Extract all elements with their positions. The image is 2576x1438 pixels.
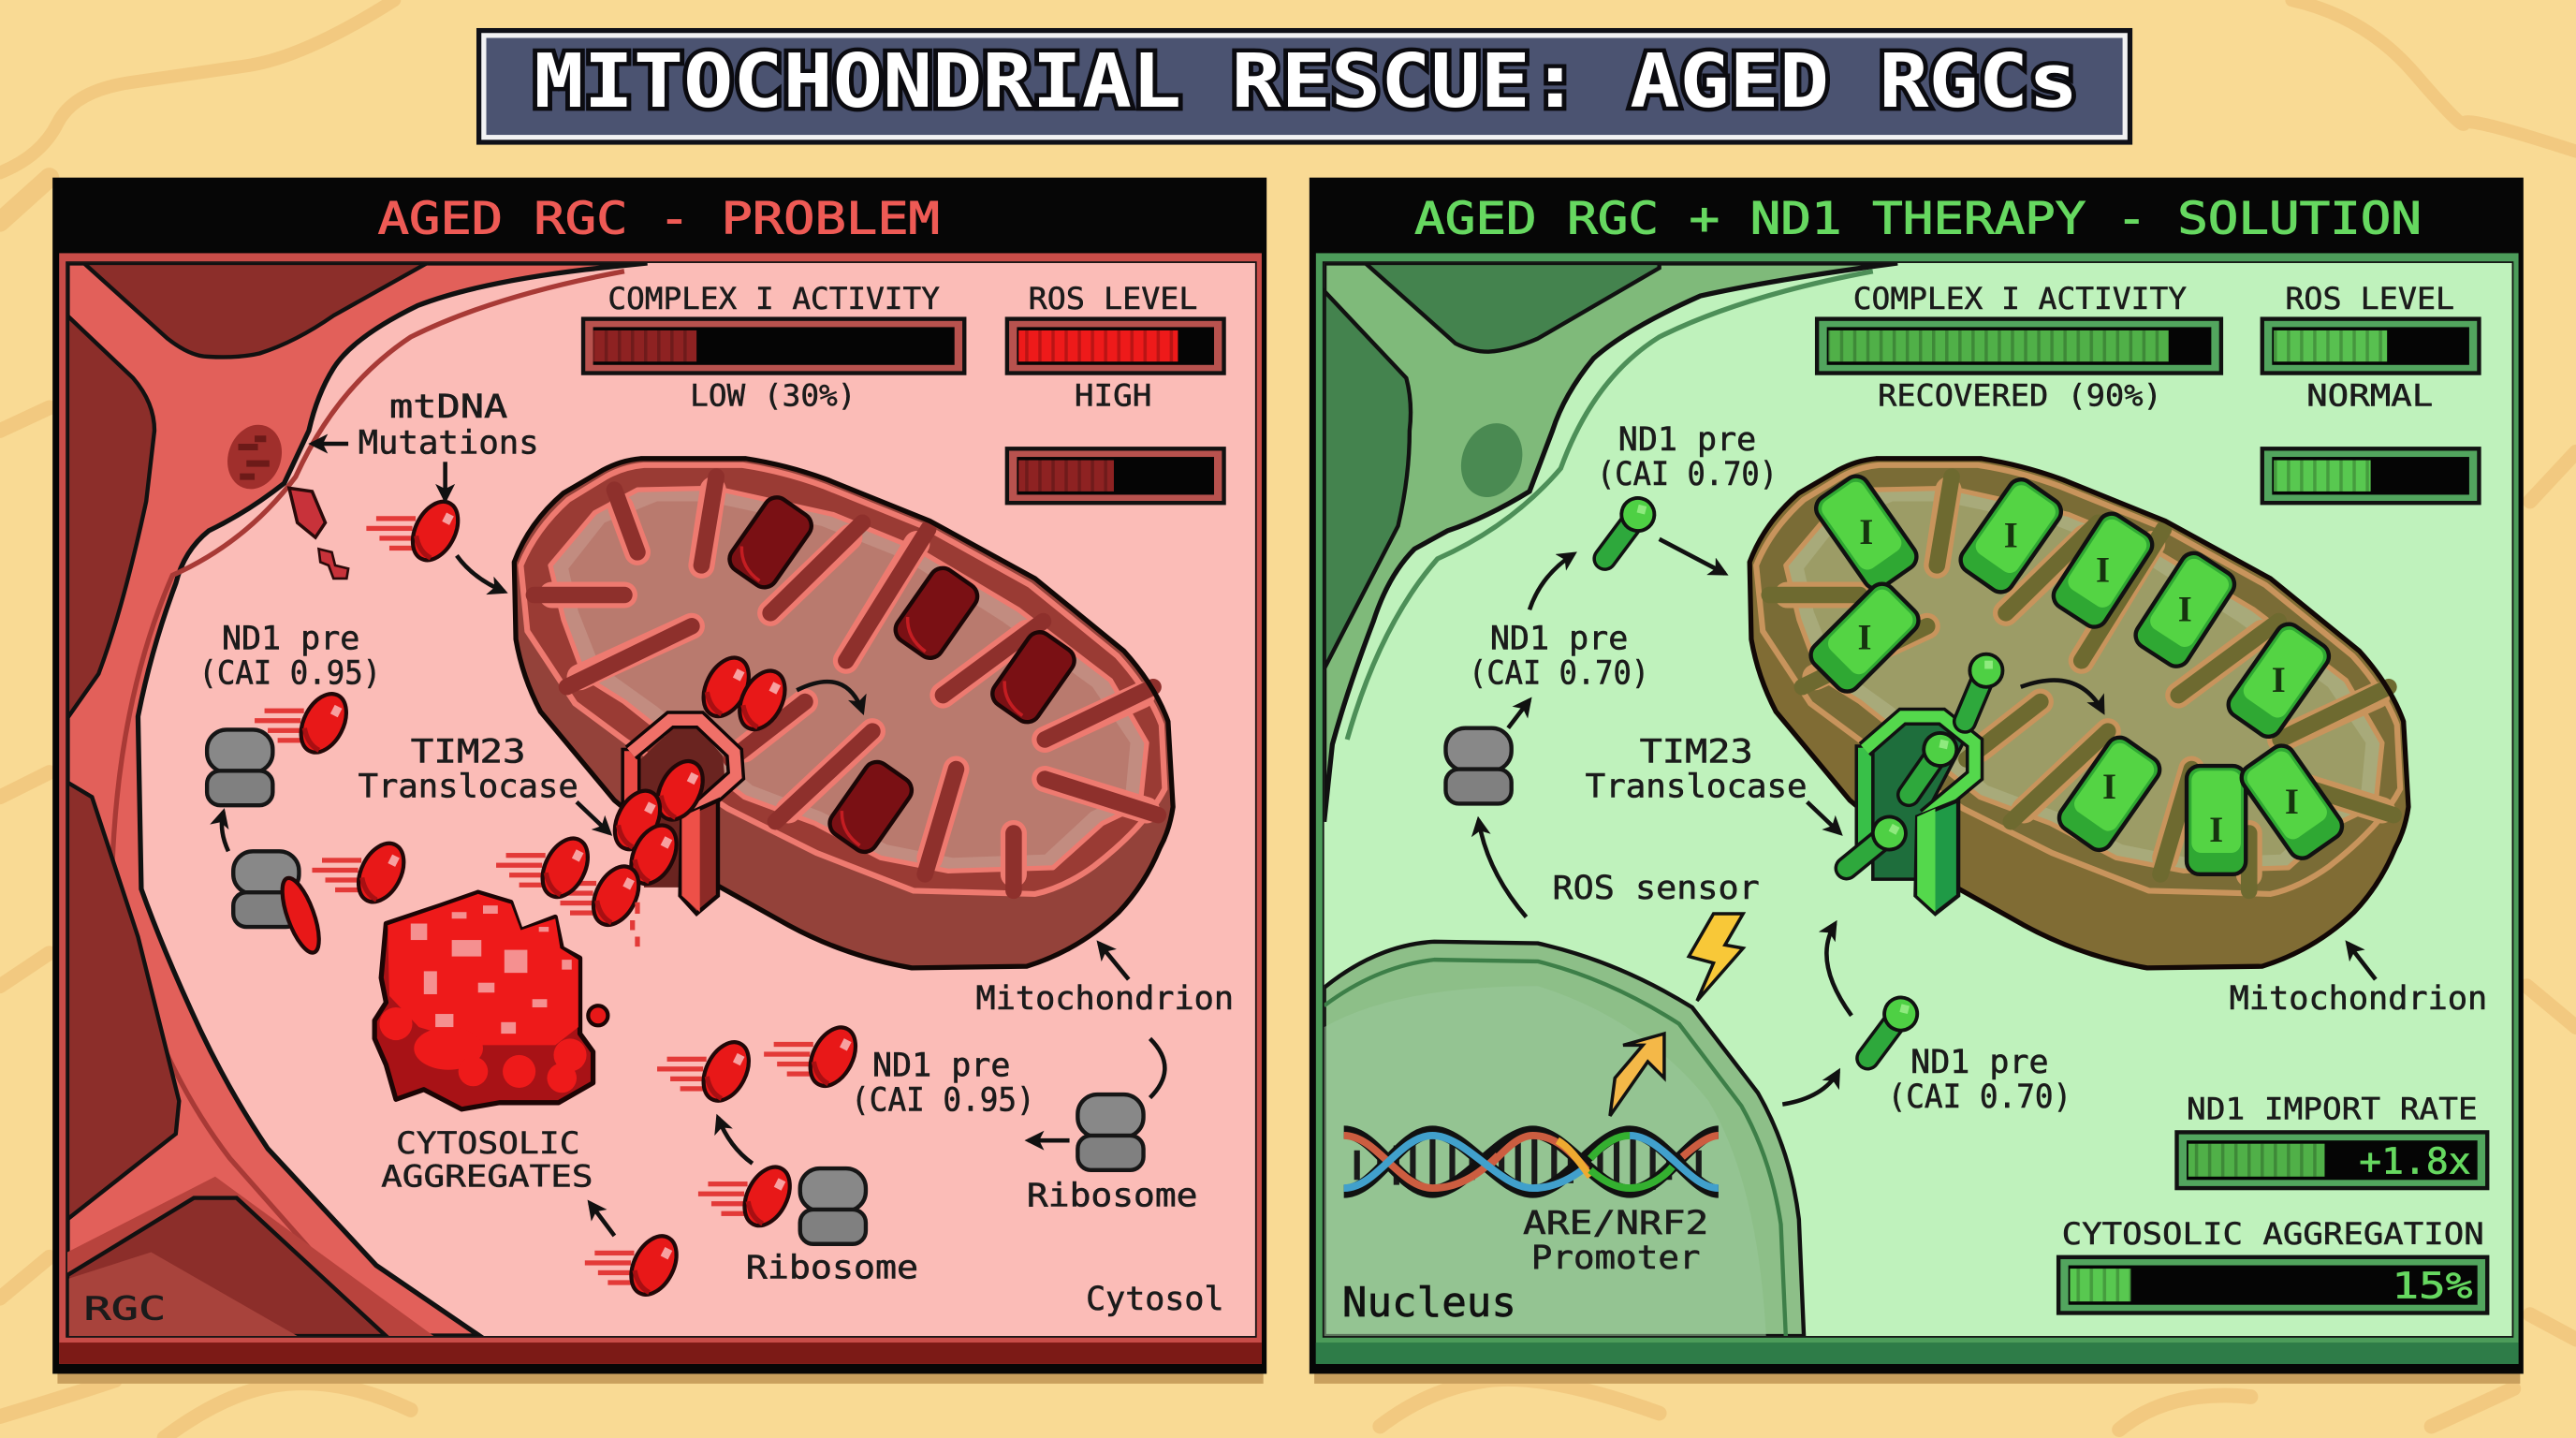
arrows left: [222, 444, 1164, 1236]
complex I blocks restored: I: [2004, 517, 2018, 556]
label: ROS LEVEL: [1029, 283, 1197, 316]
proteins and ribosomes left cytosol: [207, 494, 1144, 1302]
labels left: Ribosome: [1027, 1176, 1197, 1214]
mitochondrion right: [1749, 459, 2408, 968]
labels left: Translocase: [359, 767, 578, 805]
complex I gauge left: [583, 283, 964, 374]
labels left: Mitochondrion: [976, 979, 1234, 1018]
RGC membrane right: [1325, 263, 1897, 822]
labels left: RGC: [84, 1289, 166, 1328]
complex I blocks restored: I: [2209, 811, 2223, 850]
labels left: TIM23: [411, 733, 526, 771]
DNA helix: [1344, 1132, 1719, 1193]
labels right: [1469, 420, 2487, 1116]
labels right: ND1 pre: [1910, 1043, 2049, 1081]
promoter label: [1523, 1204, 1708, 1277]
labels left: CYTOSOLIC: [396, 1127, 580, 1161]
ND1 import rate gauge: [2177, 1093, 2487, 1188]
nucleus label: Nucleus: [1342, 1279, 1516, 1327]
heading: problem: AGED RGC - PROBLEM: [378, 193, 940, 244]
secondary gauge left: [1007, 448, 1224, 503]
labels left: ND1 pre: [872, 1047, 1010, 1085]
ND1 import rate gauge: +1.8x: [2359, 1140, 2471, 1182]
labels right: (CAI 0.70): [1888, 1078, 2071, 1116]
heading: solution: AGED RGC + ND1 THERAPY - SOLUTION: [1414, 193, 2422, 244]
labels right: ND1 pre: [1618, 420, 1756, 459]
labels right: (CAI 0.70): [1597, 455, 1778, 493]
labels right: (CAI 0.70): [1469, 653, 1649, 692]
ROS gauge left: [1007, 283, 1224, 374]
panel: ND1 therapy solution: [1310, 178, 2524, 1384]
complex I blocks restored: I: [2272, 661, 2286, 700]
proteins entering translocase: [496, 651, 794, 946]
labels right: Translocase: [1586, 767, 1808, 805]
nucleus in membrane: [1451, 415, 1532, 506]
recovered value: RECOVERED (90%): [1878, 380, 2162, 414]
labels left: mtDNA: [389, 388, 507, 426]
HIGH value: HIGH: [1075, 380, 1151, 414]
ROS gauge right: [2262, 283, 2479, 374]
icon: lightning: [1689, 914, 1743, 1001]
secondary gauge right: [2262, 448, 2479, 503]
complex I blocks restored: I: [2096, 550, 2110, 590]
icon: up arrow yellow: [1610, 1034, 1664, 1116]
complex I blocks restored: I: [2178, 591, 2192, 630]
normal value: NORMAL: [2306, 380, 2433, 414]
panel: aged RGC problem: [52, 178, 1266, 1384]
labels right: ND1 pre: [1490, 619, 1628, 657]
promoter label: ARE/NRF2: [1523, 1204, 1708, 1242]
RGC cell membrane: [67, 263, 648, 1336]
title banner: [476, 28, 2132, 145]
cytosolic aggregates: [374, 892, 607, 1109]
labels left: Ribosome: [746, 1249, 918, 1287]
complex I blocks restored: I: [1859, 513, 1873, 552]
TIM23 translocase right: [1856, 716, 1975, 914]
mitochondrion left: [514, 459, 1173, 968]
fragments of mutated protein: [289, 488, 348, 579]
label: COMPLEX I ACTIVITY: [607, 283, 940, 316]
title: MITOCHONDRIAL RESCUE: AGED RGCs: [534, 38, 2078, 125]
ND1 import rate gauge: ND1 IMPORT RATE: [2187, 1093, 2478, 1126]
nucleus: [1325, 942, 1804, 1336]
labels left: Cytosol: [1086, 1280, 1224, 1318]
labels left: (CAI 0.95): [198, 653, 381, 692]
complex I blocks restored: [1806, 471, 2347, 874]
LOW value: LOW (30%): [690, 380, 856, 414]
complex I blocks damaged: [724, 492, 1079, 857]
labels left: AGGREGATES: [381, 1160, 593, 1194]
damaged nucleus: [219, 417, 290, 497]
labels right: ROS sensor: [1553, 869, 1760, 907]
labels left: [84, 388, 1234, 1328]
complex I blocks restored: I: [2102, 768, 2116, 807]
label: COMPLEX I ACTIVITY: [1853, 283, 2187, 316]
complex I blocks restored: I: [2285, 783, 2299, 822]
labels right: TIM23: [1640, 733, 1753, 771]
labels right: Mitochondrion: [2230, 979, 2487, 1018]
labels left: Mutations: [359, 424, 539, 462]
arrows right: [1479, 539, 2376, 1105]
complex I gauge right: [1817, 283, 2221, 374]
ND1 precursors right: [1445, 493, 2002, 1067]
labels left: ND1 pre: [222, 619, 359, 657]
cytosolic aggregation gauge: CYTOSOLIC AGGREGATION: [2062, 1218, 2484, 1252]
cytosolic aggregation gauge: 15%: [2392, 1266, 2472, 1308]
labels left: (CAI 0.95): [851, 1081, 1035, 1120]
label: ROS LEVEL: [2285, 283, 2454, 316]
promoter label: Promoter: [1531, 1239, 1701, 1277]
complex I blocks restored: I: [1858, 618, 1872, 657]
cytosolic aggregation gauge: [2058, 1218, 2487, 1313]
TIM23 translocase left: [622, 720, 736, 914]
